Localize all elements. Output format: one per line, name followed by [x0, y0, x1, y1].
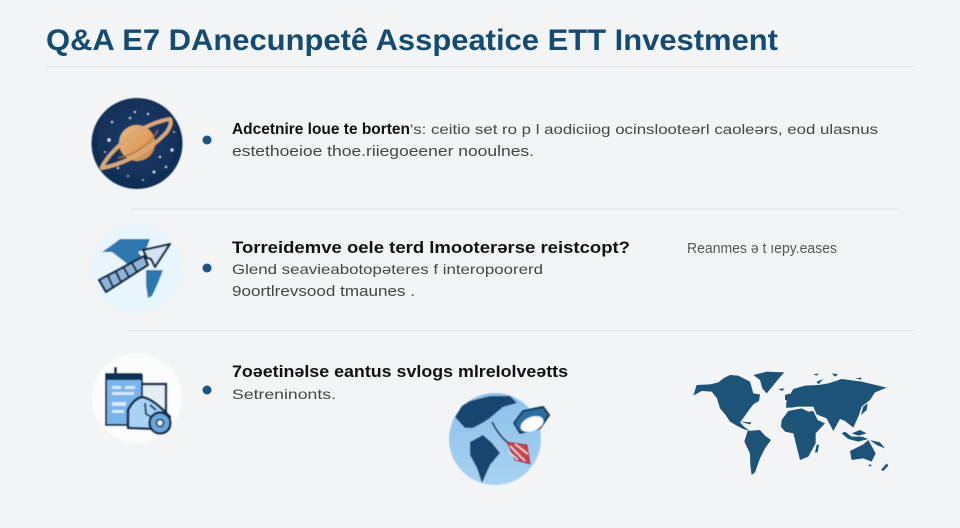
map: world [693, 372, 888, 475]
panel: item 2 [92, 224, 837, 312]
heading and description [232, 121, 878, 160]
heading and description: Setreninonts. [232, 386, 336, 402]
heading and description: Glend seavieabotopəteres f interopoorerd [232, 261, 543, 277]
heading and description [232, 238, 630, 300]
side note: Reanmes ə t ıepy.eases [687, 240, 837, 257]
icon: ringed planet [92, 98, 182, 189]
bullet [202, 386, 212, 394]
panel: item 3 [92, 353, 568, 443]
heading and description: 7oəetinəlse eantus svlogs mlreIolveətts [232, 362, 568, 381]
heading and description: Adcetnire loue te borten [232, 121, 410, 138]
heading and description: estethoeioe thoe.riiegoeener nooulnes. [232, 143, 534, 160]
heading and description [232, 362, 568, 402]
title: Q&A E7 DAnecunpetê Asspeatice ETT Investment [46, 24, 778, 57]
bullet [202, 264, 212, 272]
heading and description: 's: ceitio set ro p l aodiciiog ocinslooteərl caoleərs, eod ulasnus [410, 121, 878, 137]
heading and description: 9oortlrevsood tmaunes . [232, 284, 415, 300]
icon: rocket arrow over globe [92, 224, 182, 312]
heading and description: Torreidemve oele terd lmooterərse reistcopt? [232, 238, 630, 257]
bullet [202, 136, 212, 144]
icon: document building and gauge [92, 353, 182, 443]
panel: item 1 [92, 98, 878, 189]
icon: globe with leaf and lens [449, 393, 549, 485]
